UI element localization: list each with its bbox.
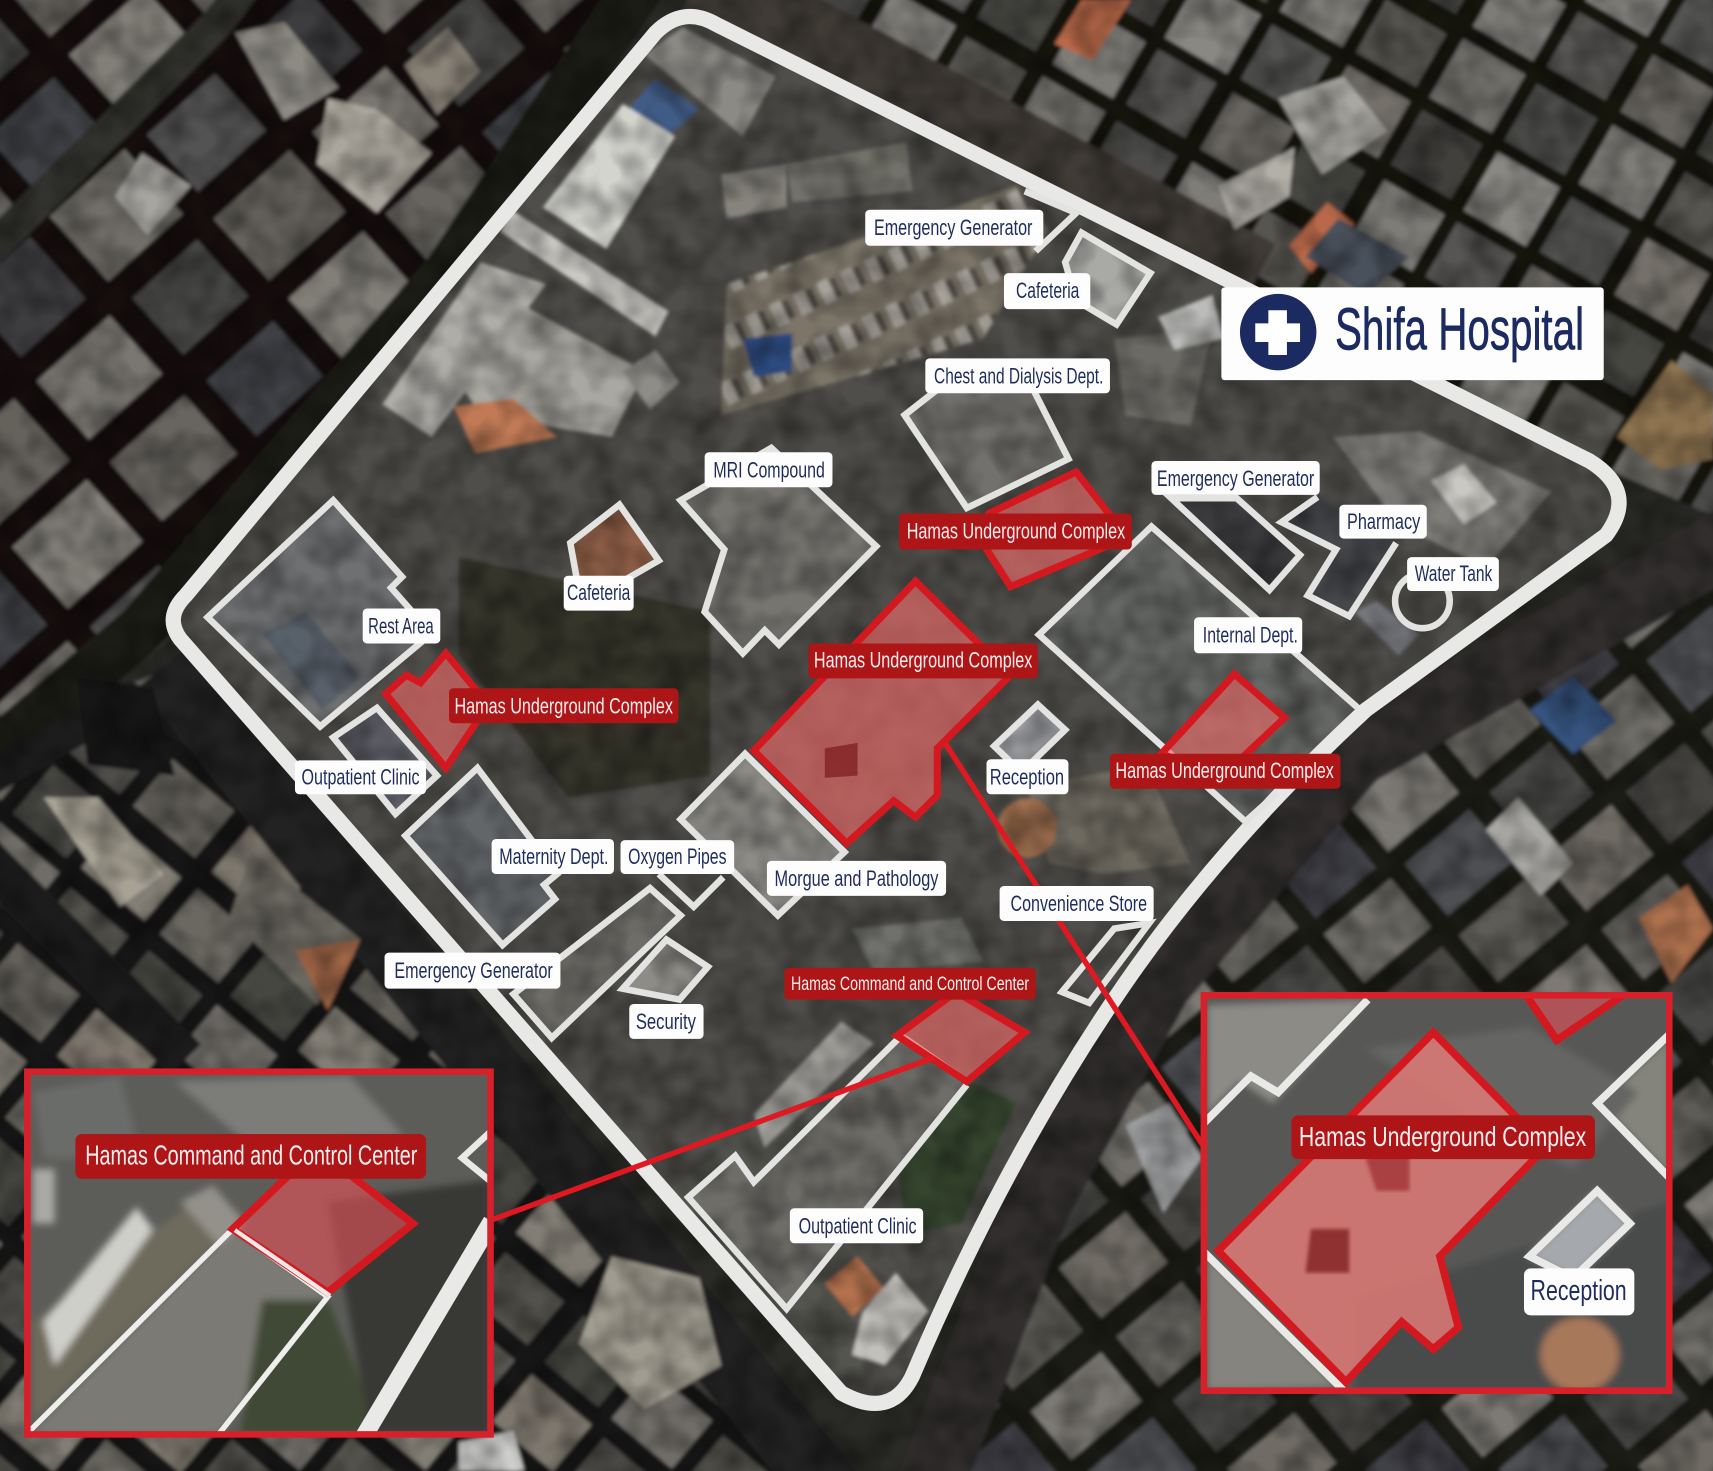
red label: Hamas Underground Complex: Hamas Underground Complex bbox=[1115, 758, 1334, 783]
label: Outpatient Clinic: Outpatient Clinic bbox=[302, 764, 420, 789]
inset frame bbox=[27, 1072, 491, 1434]
icon: medical cross bbox=[1240, 294, 1316, 370]
red label: Hamas Command and Control Center bbox=[784, 968, 1036, 1000]
red underground complexes bbox=[386, 472, 1285, 1082]
panel: underground complex inset bbox=[1200, 992, 1671, 1393]
red label: Hamas Command and Control Center: Hamas Command and Control Center bbox=[791, 973, 1029, 995]
label: Reception bbox=[987, 759, 1068, 794]
label: Reception: Reception bbox=[990, 764, 1064, 789]
compound boundary bbox=[173, 17, 1619, 1403]
panel: command center inset bbox=[27, 1072, 492, 1442]
title panel: Shifa Hospital bbox=[1221, 287, 1604, 380]
label: Emergency Generator: Emergency Generator bbox=[874, 215, 1032, 240]
red label: Hamas Underground Complex bbox=[449, 688, 678, 723]
connector lines bbox=[491, 743, 1204, 1220]
label: Cafeteria: Cafeteria bbox=[1016, 278, 1080, 303]
red label: Hamas Underground Complex: Hamas Underground Complex bbox=[454, 693, 673, 718]
label: Oxygen Pipes: Oxygen Pipes bbox=[628, 844, 727, 869]
label: MRI Compound bbox=[705, 452, 832, 487]
label: MRI Compound: MRI Compound bbox=[713, 457, 825, 482]
label: Security: Security bbox=[636, 1009, 696, 1034]
red label: Hamas Underground Complex bbox=[808, 643, 1038, 678]
inset label: Hamas Command and Control Center: Hamas Command and Control Center bbox=[85, 1140, 417, 1171]
label: Cafeteria bbox=[564, 576, 634, 611]
label: Internal Dept.: Internal Dept. bbox=[1203, 622, 1298, 647]
label: Security bbox=[629, 1004, 704, 1039]
building outlines bbox=[208, 191, 1450, 1309]
label: Outpatient Clinic bbox=[790, 1208, 923, 1243]
label: Chest and Dialysis Dept. bbox=[925, 358, 1110, 393]
inset label: Reception bbox=[1524, 1268, 1634, 1315]
label: Morgue and Pathology: Morgue and Pathology bbox=[775, 866, 938, 891]
building fills bbox=[212, 505, 414, 722]
label: Emergency Generator: Emergency Generator bbox=[394, 958, 553, 983]
label: Cafeteria bbox=[1004, 273, 1090, 309]
inset label: Reception: Reception bbox=[1531, 1275, 1627, 1307]
title panel: Shifa Hospital: Shifa Hospital bbox=[1335, 297, 1584, 363]
label: Maternity Dept.: Maternity Dept. bbox=[499, 844, 609, 869]
label: Pharmacy: Pharmacy bbox=[1347, 509, 1420, 534]
label: Rest Area bbox=[363, 609, 440, 643]
label: Emergency Generator bbox=[385, 953, 560, 989]
compound interior bbox=[181, 24, 1612, 1396]
label: Outpatient Clinic: Outpatient Clinic bbox=[799, 1213, 917, 1238]
red label: Hamas Underground Complex: Hamas Underground Complex bbox=[907, 519, 1125, 544]
label: Emergency Generator: Emergency Generator bbox=[1157, 466, 1314, 491]
label: Outpatient Clinic bbox=[295, 760, 426, 794]
label: Emergency Generator bbox=[1151, 461, 1320, 495]
inset label: Hamas Underground Complex bbox=[1291, 1115, 1595, 1159]
label: Rest Area: Rest Area bbox=[368, 614, 434, 639]
inset label: Hamas Command and Control Center bbox=[75, 1134, 426, 1179]
label: Emergency Generator bbox=[865, 210, 1043, 246]
label: Oxygen Pipes bbox=[621, 840, 734, 874]
inset frame bbox=[1204, 995, 1669, 1391]
label: Morgue and Pathology bbox=[767, 861, 946, 896]
label: Cafeteria: Cafeteria bbox=[567, 580, 631, 605]
red label: Hamas Underground Complex bbox=[1110, 754, 1340, 789]
label: Chest and Dialysis Dept.: Chest and Dialysis Dept. bbox=[934, 363, 1103, 388]
inset label: Hamas Underground Complex: Hamas Underground Complex bbox=[1299, 1121, 1587, 1152]
label: Convenience Store: Convenience Store bbox=[1011, 891, 1147, 916]
label: Internal Dept. bbox=[1194, 617, 1302, 653]
red label: Hamas Underground Complex bbox=[899, 513, 1132, 550]
label: Maternity Dept. bbox=[492, 839, 614, 874]
label: Water Tank: Water Tank bbox=[1415, 561, 1492, 586]
label: Convenience Store bbox=[1000, 886, 1154, 921]
label: Water Tank bbox=[1407, 557, 1499, 591]
red label: Hamas Underground Complex: Hamas Underground Complex bbox=[814, 647, 1032, 672]
label: Pharmacy bbox=[1339, 505, 1427, 539]
